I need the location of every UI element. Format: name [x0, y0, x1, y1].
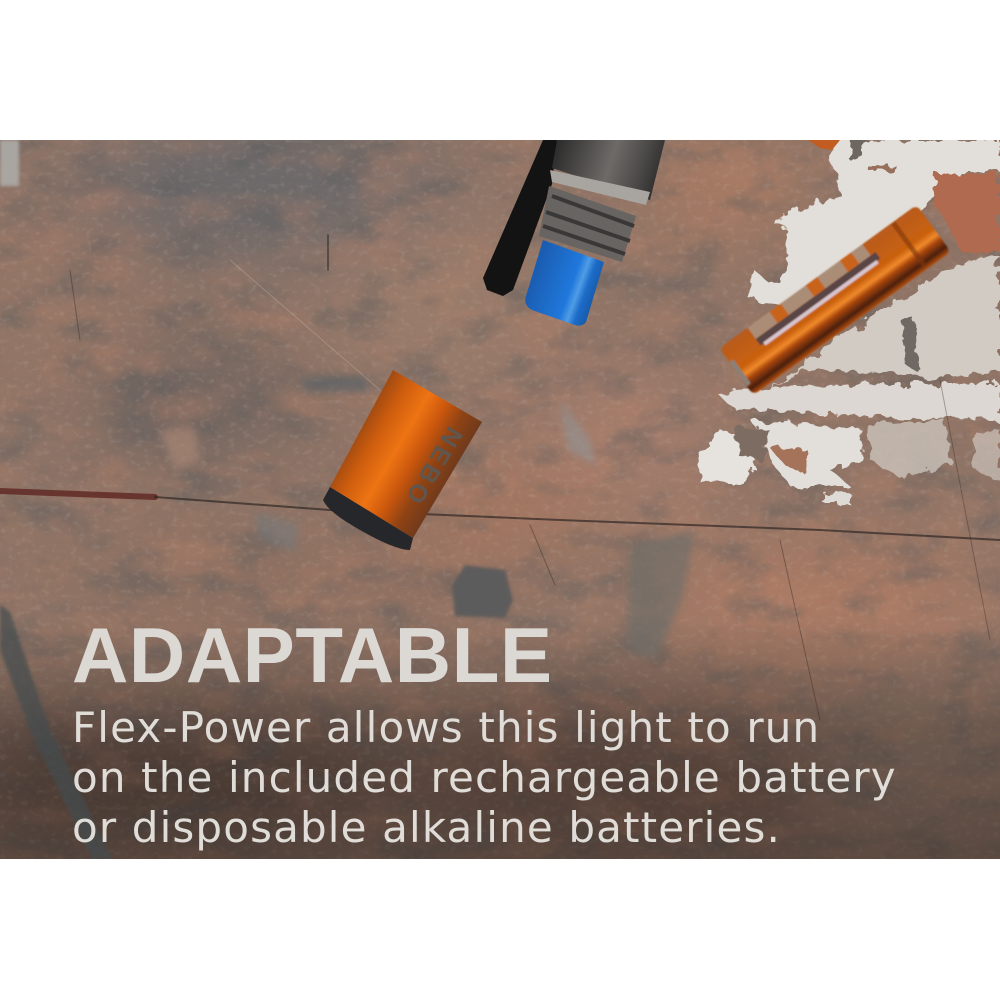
cap logo: NEBO — [398, 422, 468, 512]
cap body — [330, 370, 482, 538]
description: Flex-Power allows this light to run — [72, 703, 820, 752]
cap base — [323, 487, 413, 550]
flashlight barrel — [552, 140, 665, 200]
wood base — [0, 140, 1000, 859]
mottled wear texture — [0, 140, 1000, 859]
description — [72, 703, 897, 852]
grey worn patches — [0, 140, 513, 859]
pocket clip — [483, 140, 557, 296]
orange battery — [719, 205, 951, 395]
white paint patches — [698, 140, 1000, 504]
description: on the included rechargeable battery — [72, 753, 897, 802]
description: or disposable alkaline batteries. — [72, 803, 781, 852]
text block — [72, 611, 897, 852]
orange end cap with NEBO mark — [323, 370, 482, 550]
heading: ADAPTABLE — [72, 611, 553, 699]
top edge orange piece — [808, 140, 840, 150]
threaded neck — [539, 186, 636, 262]
blue battery tip — [525, 240, 604, 326]
gaps in paint — [850, 140, 868, 165]
scratches and cracks — [0, 235, 1000, 720]
flashlight body with blue battery — [483, 140, 665, 326]
chrome ring — [550, 170, 650, 205]
photo: workbench scene — [0, 140, 1000, 859]
